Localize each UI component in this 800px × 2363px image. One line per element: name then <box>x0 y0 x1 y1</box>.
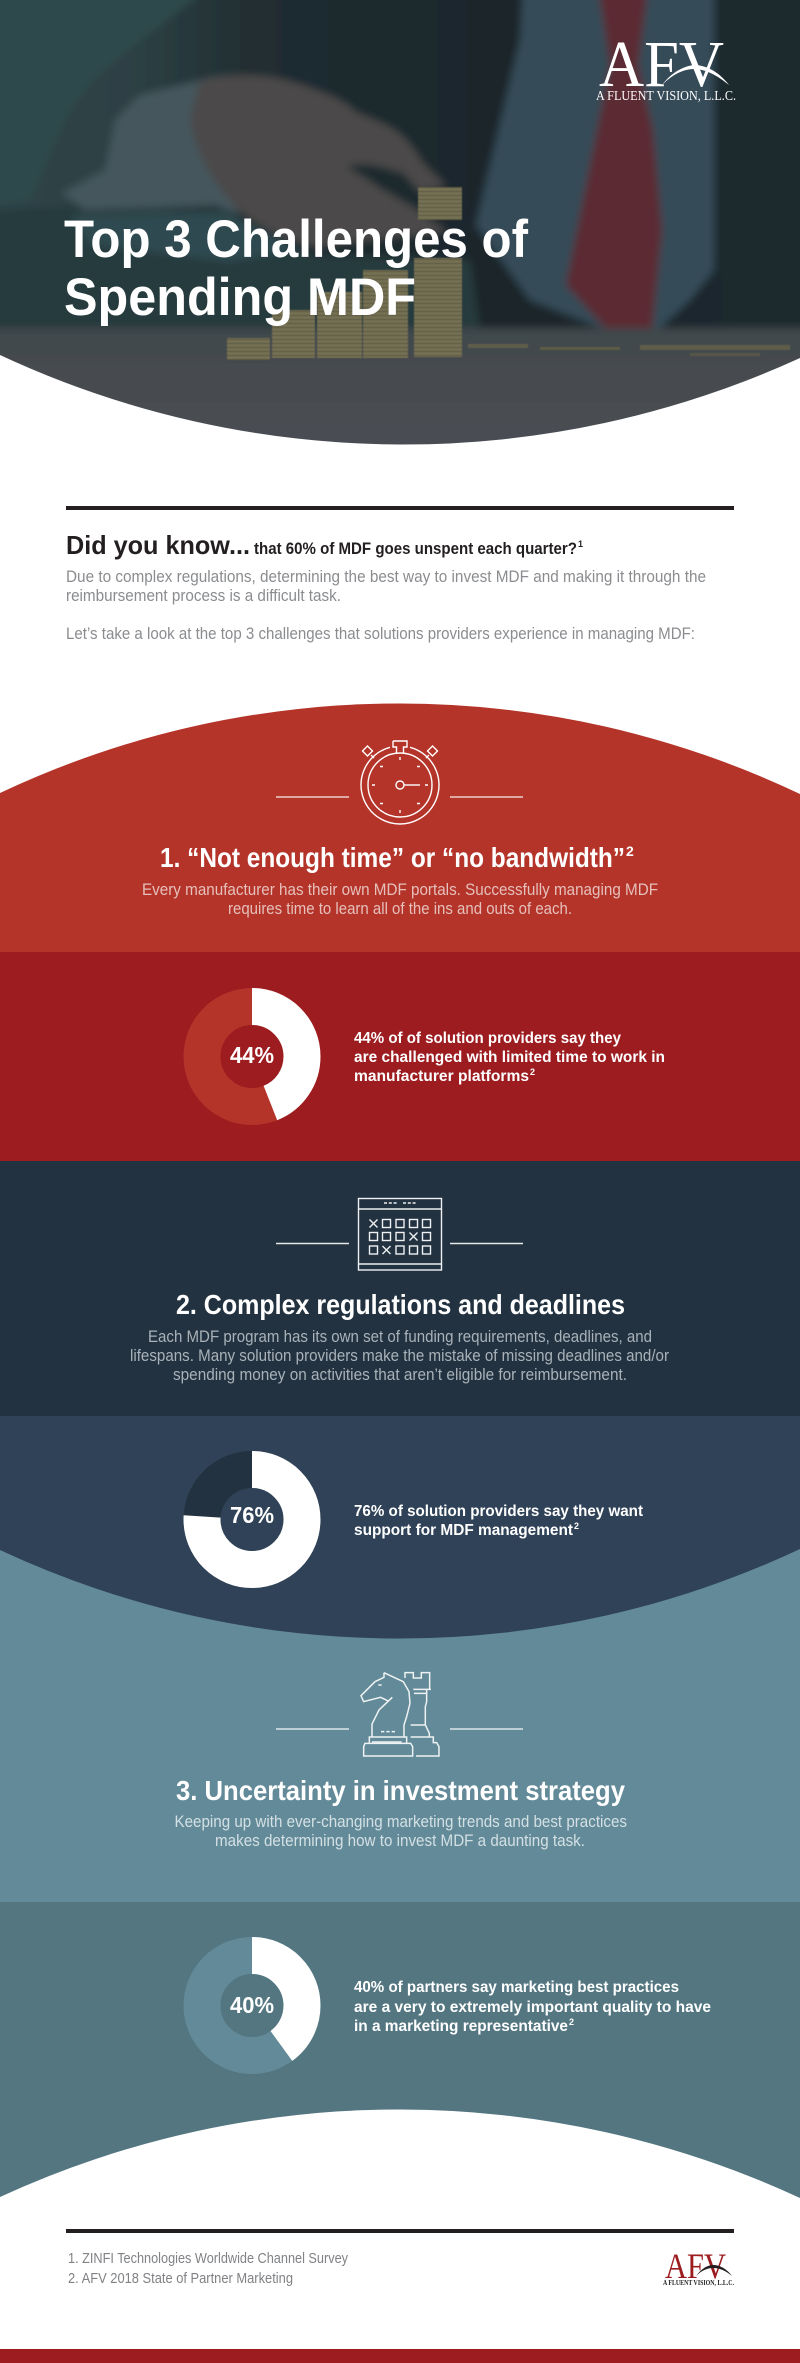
logo: AFV white: A FLUENT VISION, L.L.C. <box>596 88 736 103</box>
text: 44% statistic: are challenged with limited time to work in <box>354 1049 665 1066</box>
donut chart: 44% <box>202 1006 302 1106</box>
icon: stopwatch <box>361 741 439 824</box>
text: challenge 3 description: makes determining how to invest MDF a daunting task. <box>215 1832 585 1850</box>
donut chart: 40% <box>202 1956 302 2056</box>
text: 40% statistic <box>354 1979 711 2035</box>
text: challenge 1 description <box>142 881 658 918</box>
divider lines beside stopwatch <box>276 796 523 798</box>
text: 76% statistic: 76% of solution providers say they want <box>354 1503 644 1520</box>
donut chart: 76% <box>202 1470 302 1570</box>
bottom bar <box>0 2349 800 2363</box>
donut chart: 44%: 44% <box>230 1042 274 1068</box>
panel: challenge 1 header <box>0 704 800 953</box>
heading: challenge 1: 2 <box>626 843 634 859</box>
text: 44% statistic: 44% of of solution providers say they <box>354 1030 621 1047</box>
icon: chess knight and rook <box>361 1673 439 1756</box>
text: 44% statistic <box>354 1030 665 1085</box>
intro: did you know: reimbursement process is a difficult task. <box>66 587 341 605</box>
text: 44% statistic: 2 <box>530 1067 535 1077</box>
text: 76% statistic <box>354 1503 644 1539</box>
intro: did you know: Did you know... <box>66 530 250 560</box>
panel: challenge 2 header <box>0 1161 800 1417</box>
text: 40% statistic: 2 <box>569 2017 574 2027</box>
footer white arch <box>0 2109 800 2363</box>
text: challenge 2 description: spending money on activities that aren’t eligible for reimbursement. <box>173 1366 627 1384</box>
text: challenge 2 description <box>130 1328 669 1384</box>
divider lines beside chess icon <box>276 1728 523 1730</box>
title <box>64 210 528 327</box>
text: challenge 2 description: Each MDF program has its own set of funding requirements, deadlines, and <box>148 1328 652 1346</box>
text: 40% statistic: in a marketing representative <box>354 2018 568 2035</box>
panel: challenge 1 statistic <box>0 952 800 1161</box>
intro: did you know <box>66 530 706 643</box>
intro: did you know: 1 <box>578 539 583 549</box>
divider lines beside calendar <box>276 1242 523 1244</box>
panel: challenge 3 background <box>0 1416 800 1902</box>
logo: AFV red: AFV <box>665 2246 726 2286</box>
donut chart: 76%: 76% <box>230 1502 274 1528</box>
title: Spending MDF <box>64 268 416 327</box>
text: 76% statistic: support for MDF management <box>354 1522 574 1539</box>
text: 44% statistic: manufacturer platforms <box>354 1068 529 1085</box>
logo: AFV white: AFV <box>599 28 724 101</box>
intro: did you know: Let’s take a look at the top 3 challenges that solutions providers experience in managing MDF: <box>66 625 695 643</box>
heading: challenge 1: 1. “Not enough time” or “no bandwidth” <box>160 842 625 873</box>
footnotes: 1. ZINFI Technologies Worldwide Channel Survey <box>68 2251 349 2267</box>
panel: challenge 2 statistic <box>0 1416 800 1639</box>
text: challenge 1 description: requires time to learn all of the ins and outs of each. <box>228 900 572 918</box>
heading: challenge 3: 3. Uncertainty in investment strategy <box>176 1775 625 1806</box>
donut chart: 40%: 40% <box>230 1992 274 2018</box>
logo: AFV red: A FLUENT VISION, L.L.C. <box>663 2278 734 2287</box>
top divider rule <box>66 506 734 510</box>
icon: calendar <box>358 1198 442 1270</box>
bottom divider rule <box>66 2229 734 2233</box>
text: challenge 1 description: Every manufacturer has their own MDF portals. Successfully managing MDF <box>142 881 658 899</box>
footnotes: 2. AFV 2018 State of Partner Marketing <box>68 2271 293 2287</box>
heading: challenge 2: 2. Complex regulations and deadlines <box>176 1289 625 1320</box>
text: challenge 3 description <box>174 1813 627 1850</box>
text: 40% statistic: are a very to extremely important quality to have <box>354 1999 711 2016</box>
hero photo banner <box>0 0 800 470</box>
panel: challenge 3 statistic <box>0 1902 800 2212</box>
intro: did you know: Due to complex regulations, determining the best way to invest MDF and making it through the <box>66 568 706 586</box>
intro: did you know: that 60% of MDF goes unspent each quarter? <box>254 540 577 558</box>
panel: challenge 3 header <box>174 1673 627 1850</box>
text: challenge 2 description: lifespans. Many solution providers make the mistake of missing deadlines and/or <box>130 1347 669 1365</box>
text: challenge 3 description: Keeping up with ever-changing marketing trends and best practices <box>174 1813 627 1831</box>
text: 76% statistic: 2 <box>574 1521 579 1531</box>
title: Top 3 Challenges of <box>64 210 528 269</box>
footnotes <box>68 2251 349 2287</box>
text: 40% statistic: 40% of partners say marketing best practices <box>354 1979 679 1996</box>
